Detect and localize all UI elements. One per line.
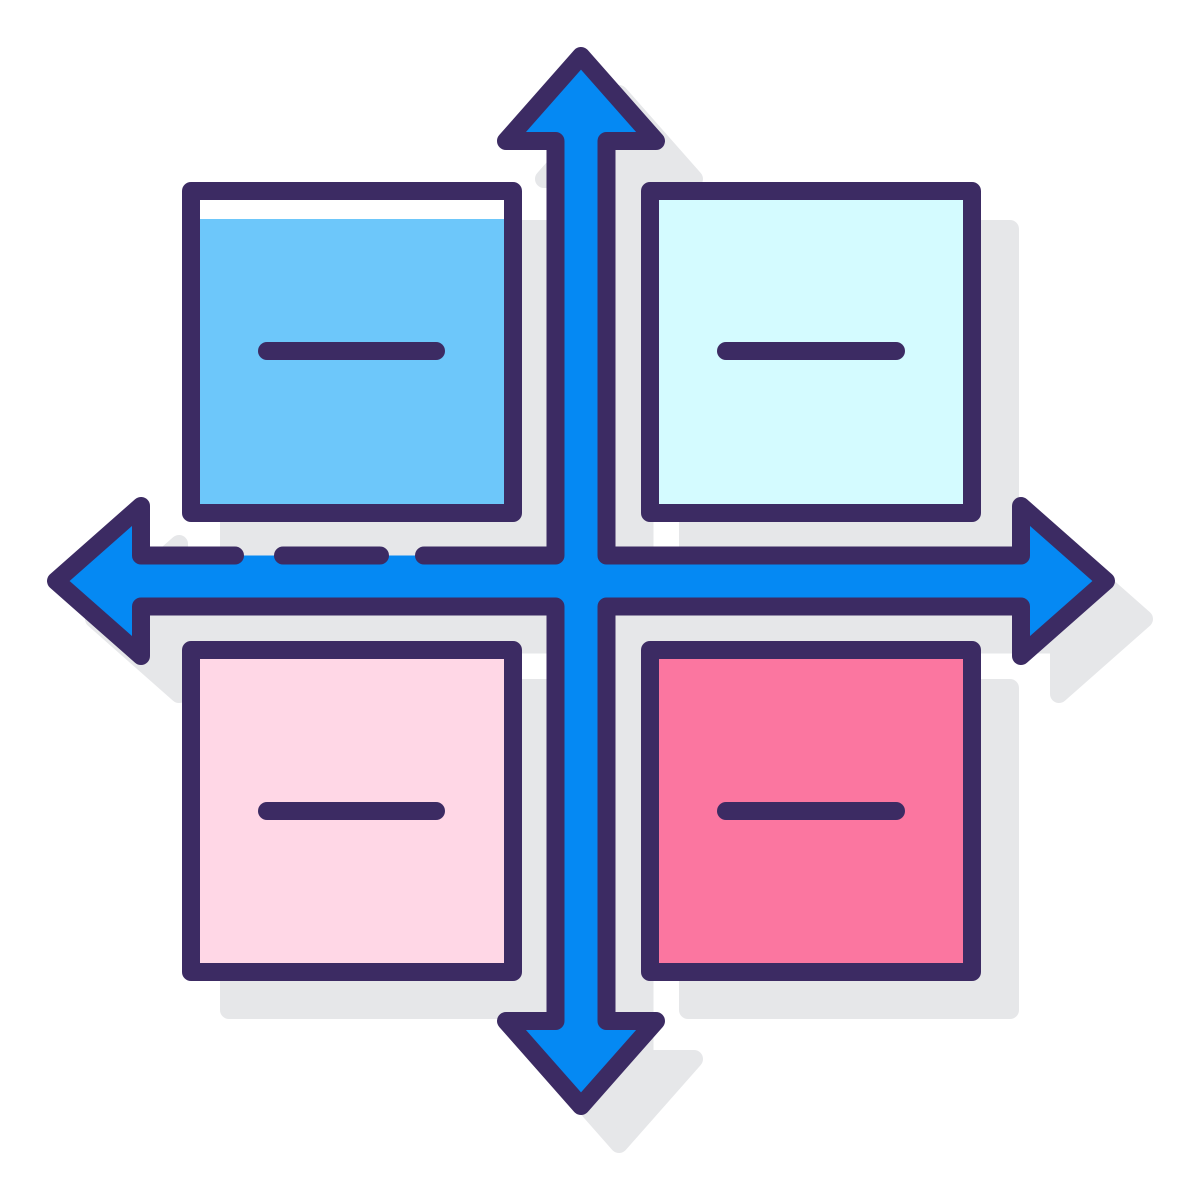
drop shadow layer — [94, 94, 1144, 1144]
quadrant: top left blue square — [191, 191, 513, 513]
axis cross: four-way blue arrow — [56, 56, 1106, 1106]
quadrant: top right pale cyan square — [650, 191, 972, 513]
quadrant: bottom left light pink square — [191, 650, 513, 972]
quadrant: bottom right hot pink square — [650, 650, 972, 972]
